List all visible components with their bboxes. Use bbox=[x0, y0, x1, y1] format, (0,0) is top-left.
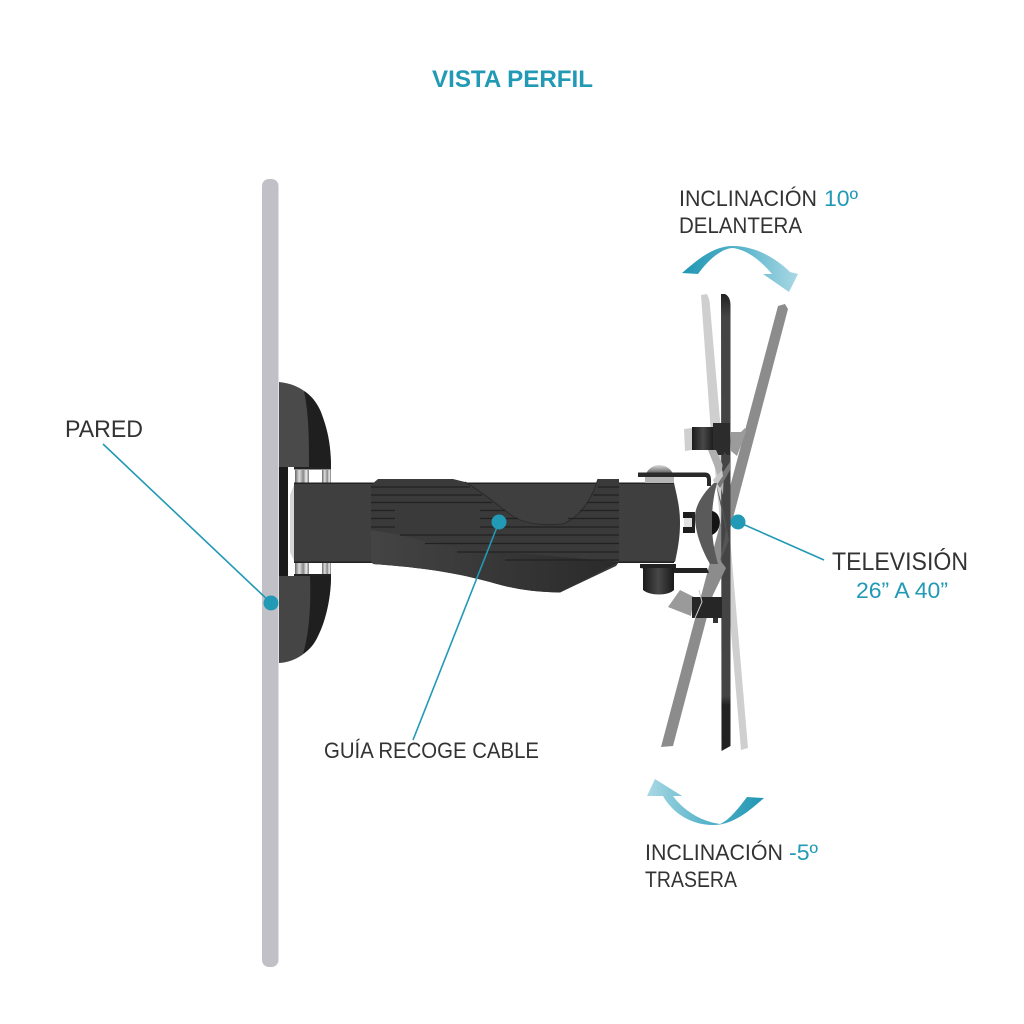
wall plate bbox=[279, 382, 331, 663]
knob bbox=[712, 511, 720, 535]
mount hinge bbox=[638, 462, 730, 597]
label: forward tilt: DELANTERA bbox=[679, 213, 802, 238]
lower tv bracket bbox=[668, 590, 722, 623]
callout: guia recoge cable bbox=[324, 514, 539, 763]
label: forward tilt: INCLINACIÓN bbox=[679, 186, 817, 211]
arrow: backward tilt bbox=[647, 779, 764, 825]
label: backward tilt: TRASERA bbox=[645, 867, 737, 892]
label: forward tilt: 10º bbox=[824, 186, 858, 211]
callout: television: 26” A 40” bbox=[856, 578, 948, 603]
title: VISTA PERFIL bbox=[432, 66, 593, 93]
wall bbox=[262, 179, 278, 967]
tv panel main bbox=[721, 294, 730, 751]
label: forward tilt bbox=[679, 186, 858, 238]
label: backward tilt: -5º bbox=[789, 840, 818, 865]
label: backward tilt bbox=[645, 840, 818, 892]
tv panel tilted forward bbox=[661, 304, 788, 747]
cable guide bbox=[371, 479, 619, 592]
link strips bbox=[716, 462, 730, 488]
arrow: forward tilt bbox=[682, 246, 798, 292]
callout: television: TELEVISIÓN bbox=[832, 547, 968, 576]
arm bbox=[294, 482, 680, 563]
callout: pared bbox=[65, 416, 278, 610]
ribs bbox=[371, 487, 619, 560]
callout: television bbox=[730, 514, 968, 603]
tv panel tilted back bbox=[701, 294, 748, 750]
upper tv bracket bbox=[684, 423, 746, 495]
label: backward tilt: INCLINACIÓN bbox=[645, 840, 783, 865]
crescent plate bbox=[695, 483, 718, 564]
bolt bbox=[683, 512, 692, 518]
callout: pared: PARED bbox=[65, 416, 143, 443]
callout: guia recoge cable: GUÍA RECOGE CABLE bbox=[324, 738, 539, 763]
